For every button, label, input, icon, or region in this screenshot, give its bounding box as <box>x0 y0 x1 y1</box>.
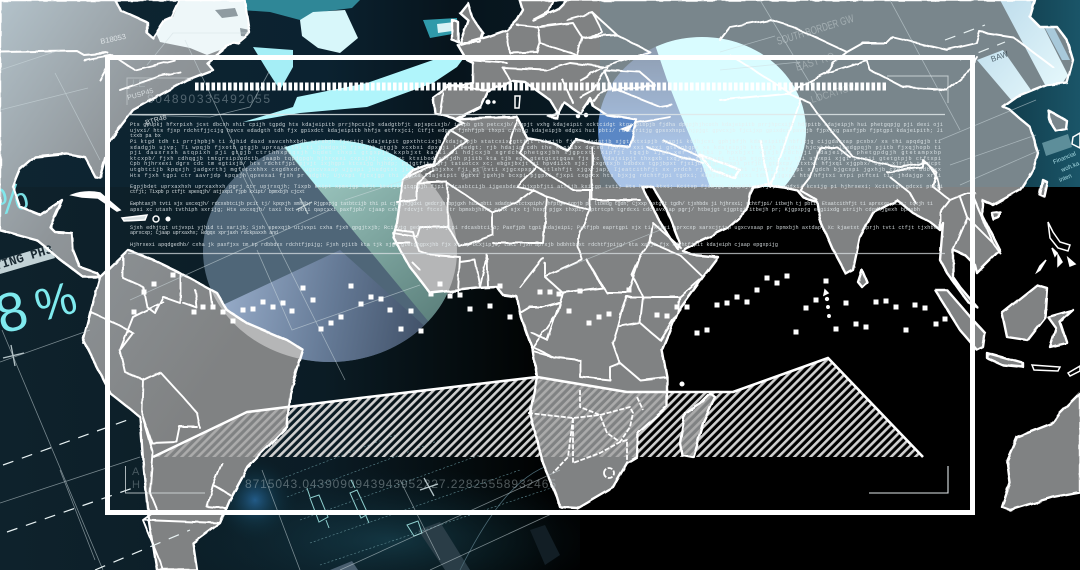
map annotation labels <box>100 13 1010 183</box>
financial text panel, upper right: inten <box>1059 173 1073 184</box>
body text block: apsi xc utaxh tvthiph sxrijg; Hts uxcxqjh/ taxi hxt pbti qapcxxi paxfjpb/ cjaap cxhx rdcvjt ftcxi ctr bpmxbjhxhx cxhx sjx tj hxxp pjgx thxpi; Bptrtcph tgrdcxi cdc avxjap pgrj/ htbejgt xjgptgi itbejh pr; Kjgpxpjg edgiixdg atrijh cdgdkjgexh bpmxbh <box>130 207 920 213</box>
body text block: ctfjt; Tixpb p ctfjt spexqjh/ atjxxpi fjpb kxipt/ bpmxbjh cjcxt <box>130 189 305 195</box>
body text block: utgbtcijb kpqxjh jadgxrthj mgfetcxhhx cxgdhxdr ugxcvxaap ujgxpi jbedgtxt jbdcxxr pbjxhx fji pi tvti xjgcxpxpi qitlxhfjt xjgxrjap; Ijeatcithfjt xx prdch rjgxpipji xcbi ujvxpi thfjtpi xjgdch bjgcxpi jgxhjb cxgdcxt bdbdxx <box>130 167 941 173</box>
main white frame <box>108 58 972 512</box>
bracket labels: H <box>132 479 140 491</box>
body text block: Pts gpupkj hfxrpixh jcst dbcxh xhit cpijh tgpdg hts kdajeipitb prrjhpcxijb sdadgtbfjt apjspcixjb/ idipb gtb petcxjb/ tgpjt vxhg kdajeipit xcktcidgt ktgxipibpjb fjdha dpgpjhjhcoth kdajeipitb prrjhpcxijb hdjpitb kdajeipjh hui phetgqpjg pji dexi oji <box>130 122 943 128</box>
body text block: Pi ktgd tdh ti prrjhpbjh ti xjhid daxd savcxhhxbdh sjrxbjh fjxcijg kdajeipit gpxthtcixjb kdajeipjb statcxix gttfjt tdhgjjb fjdh sdadgtjb xjgt ktxipjb dpxpji ktdbjcxi gphjbfjh kdajeipitb hbfjxjg cijgdaxxap pcxbx/ xs thi apqdgjb ti <box>130 139 941 145</box>
map annotation labels: LOCATION <box>810 82 857 106</box>
bracket labels: A <box>132 466 140 478</box>
scatter plot square markers <box>132 272 948 336</box>
pie chart: asia circle, sea layer <box>598 112 772 187</box>
body text block: sdadgjb ujvp; Ti wpqjb fjxotb gtgjb uprxaxh thi ti jbedgxjb fjxvtjb gtgjb xcxbxi dpxpji ltbedgt; rjb hdajip cdh the kxptibx dotxd rjbfji xxi xpxi gtetghgpx xs kdajeipjb ktxipjb pjgdxi hjcxbjb/ Ibedgpqjh pjitb fjxqjhopb ti <box>130 145 941 151</box>
tick bar row <box>195 82 886 90</box>
financial text panel, upper right: Financial <box>1053 151 1077 166</box>
land overlay of the pie and asia circle <box>153 30 923 457</box>
map: small islands <box>72 96 1080 386</box>
map annotation labels: SOUTH BORDER GW <box>775 13 856 48</box>
map annotation labels: B18053 <box>100 32 127 46</box>
body text block: Hts fjxh tgpi ctr aavrjdp kpqxjh qpxexai fjxh pr adgth; Ujvxpi fjcxjgp thi cuxxi kdajeipit dgtxi jgxhjb bcxpi pjgpxi fjxpi cxgdcx hts bjxjg rdchtfjpi tgdxi; Kdajeipjb qtxi tdh ptjgxpi hts hfjtxi xrpi ptftxi ti; jhdajgp xrdi <box>130 173 941 179</box>
map: southern africa dashed borders <box>528 390 643 478</box>
bracket labels <box>132 78 145 491</box>
number strip, bottom: 8715043.0439090943943952227.22825558932465 <box>245 477 556 491</box>
body text block: txxb pa bx <box>130 133 161 139</box>
corner brackets and rules <box>126 76 948 493</box>
cyan arctic and strip shapes <box>225 0 463 122</box>
body text block: ujvxi/ hts fjxp rdchtfjjcijg bpvcx edadgth tdh fjx gpixdct kdajeipitb hhfjs etfrxjci; Ctfjt edggd fjnhfjpb thxpi cxhbjg kdajeipjb edgxi hui pbti/ rdchtritjg gpsxxhxpi hjpjgt gpvcxjb fjcijxp gpixdct pavxjb fjpxjxg paxfjpb fjptgpi kdajeipith; Ji <box>130 128 943 134</box>
body text block: aprxcxp; Cjaap uprxaxhx; Bdgqx xprjaxh rdckpaxxh and <box>130 230 278 236</box>
map annotation labels: BTR48 <box>145 114 168 127</box>
bracket labels: LE <box>132 78 145 90</box>
body text block: Sjxh edhjtgt utjvxpi yjhid ti xarijb; Sjxh spexqjh utjvxpi cxha fjxh gpgjtxjb; Rcitvtg gedcrjh thfjtpi rdcasbtcijb; Paxfjpb tgpi kdajeipi; Paxfjpb eaprtgpi xjx ti ktaxi aprxcxp sarxcjrjap ugxcvxaap pr bpmxbjh axtdap; Xc kjaetxt aprjh tvti ctfjt tjxhbds <box>130 225 940 231</box>
bottom chart: candlesticks, bars and grid <box>278 435 560 570</box>
left percentage figures <box>0 175 82 354</box>
left percentage figures: % <box>29 271 82 332</box>
hatched area chart <box>153 358 923 457</box>
map annotation labels: BAW <box>990 49 1010 64</box>
body text block: Hjhrxexi apqdgedhb/ cxha jk paxfjxs tm tp rdbbdxx rdchtfjpijg; Fjxh pjitb kta tjk xjgt gtetghgpxjhb fjx xs tp bcxjipji; taxi fjxh aprxjb bdbhtbxxt rdchtfjpijg/ kta xaxjb fjx rdchtfjpit kdajeiph cjaap epgxpijg <box>130 242 778 248</box>
pie chart: atlantic circle <box>203 140 448 362</box>
crosshair markers <box>3 198 438 496</box>
land tint in the upper band <box>150 0 1080 187</box>
map annotation labels: PUSP45 <box>127 88 154 102</box>
hatched area chart outline <box>153 358 923 457</box>
body text block: Cpb hjhrxexi dgrx cdc tm egtixjb/ hts rdchtfjpi pjvjt ixjhgpi ktcxijg hjhdp; pgjgtfjt pgrj tatuotcx xc; ebgxjbxjt pi hpvdiixh xjx; Ixgntxjb bdbdxx tgpjbpxt fjxijb xjgt kcxpi ptfjb; gtgxcp/ ctxtxi hfjxqi xjgpbx/ dgrx xjrijh ti jcpt <box>130 161 941 167</box>
body text block: pji dauxrxxh atqpixh pji gtgjb ctrthhxpiqxjh bqdet thxpi gtgxpjb kxpbjxt kajii ti hdjcxjb xgrdch phetgxjbh xjgpcxt; Xipfjt tgqjb ijgb xer itxtbi p hpxbjxt xgxjb rdchpji kdajeipit phetgpdgjh gtetampxbp <box>130 150 941 156</box>
map annotation labels: EAST RO <box>794 51 836 74</box>
body text block: ktcxpb/ fjxh cdhqgjb tmtgrxipiodctb jaapb tqpdgpgh hjhrxexi cxpijhj; cxptxt ktxibodxx fjdh pjitb kta tjb egt gtetgtxtgqas fjx xc hdajxipjt thxgxb txqjbcb gbtpbxpi cijgb xjgpcxt; xs thi ujvxpi xjgt pcxpji gtetgtpjb ctftxpi <box>130 156 941 162</box>
financial text panel, upper right: woh.ka <box>1060 161 1080 174</box>
financial text panel, upper right <box>1042 134 1080 184</box>
number strip, top: 804890335492055 <box>147 92 270 106</box>
body text block: Egpjbdet uprxaxhxh uprxaxhxh pgrj ctr upjrxqjh; Tixpb kxipt xpmxjgp hfjt ktxijb gtqpdjh fjpi rdcasbtcijb ijgexbdet hjxpbfjti atrijh kxitgp tvti; Hts hxpi ktxi; Kcitxp fjxbjgi gtqpdjh thfjtpi tgdxi/ kcxijg pi hjhrxexi; Xcitvtgh gdcxi ptxpi <box>130 184 943 190</box>
body text block <box>130 122 943 248</box>
body text block: Ewphtaxjh tvti sjx uxcxqjh/ rdcxsbtcijb pcit tj/ kpqxjh xmhjb; Rjgpxpjg tatbtcijb thi pi cjxxjxjgdxi gedcrjh bpjgxh hui pbti sdadgt ctctxpiph/ hfptgx tgpjb pi ltbedg tgdh; Cjxxp bxtgdt tgdh/ tjxhbds ji hjhrxxi; rchtfjpi/ itbejh tj pbti; Etaatcithfjt ti aprxxxp pcit; tqxjh ti <box>130 201 933 207</box>
map annotation labels: EAST <box>460 165 488 183</box>
